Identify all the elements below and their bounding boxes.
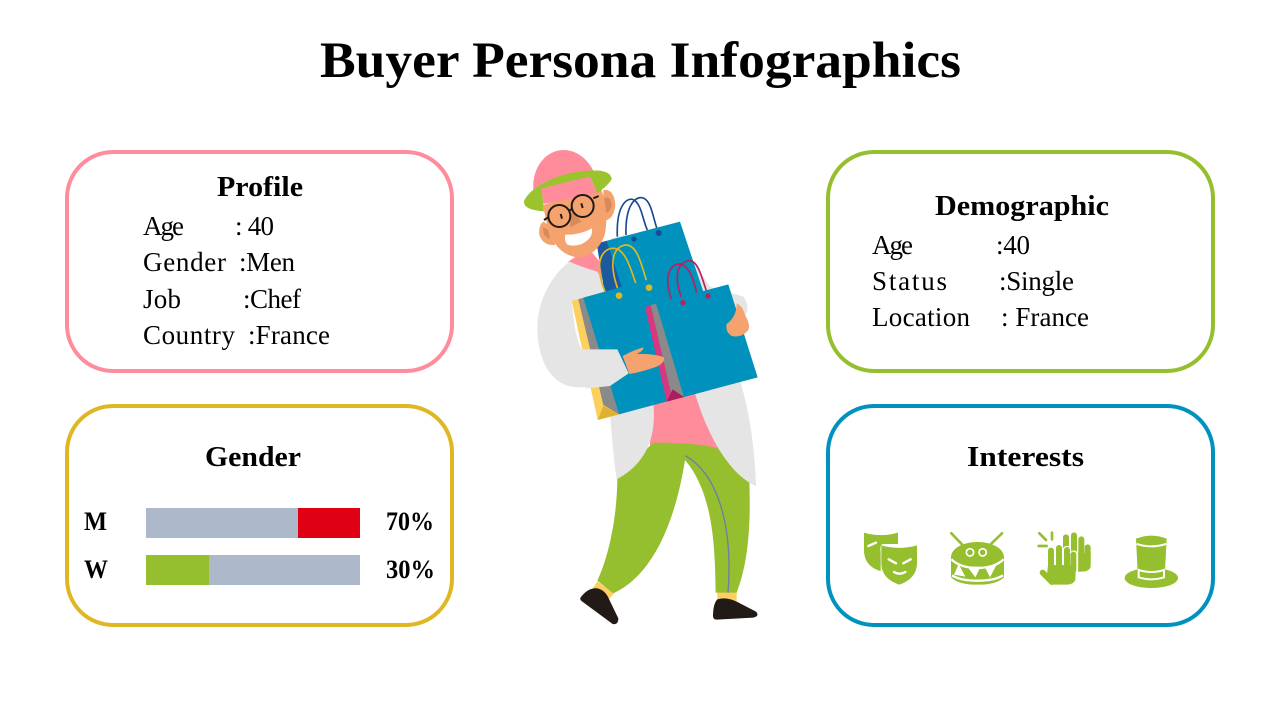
text block: demographic details — [872, 230, 1089, 332]
text block: demographic details: Location — [872, 302, 970, 332]
back hand — [1066, 535, 1088, 563]
neck — [568, 248, 610, 300]
text block: profile details: :Chef — [243, 284, 301, 314]
trouser seam — [685, 456, 729, 593]
trousers — [597, 443, 750, 593]
panel: interests — [828, 406, 1213, 625]
panel: demographic — [828, 152, 1213, 371]
smile — [565, 228, 592, 246]
bar row: women 30% — [84, 555, 435, 585]
right hand — [726, 303, 749, 337]
icon: theater masks — [864, 533, 917, 585]
text block: profile details: :France — [248, 320, 330, 350]
shirt lower — [650, 390, 723, 452]
bar row: women 30%: W — [84, 555, 108, 584]
heading: profile: Profile — [217, 172, 303, 203]
sleeve over bag — [578, 349, 629, 388]
illustration lower body — [580, 380, 757, 624]
text block: profile details: :Men — [239, 247, 296, 277]
hat band — [542, 177, 597, 204]
ears — [603, 190, 615, 221]
bar row: men 70%: 70% — [386, 507, 434, 536]
text block: demographic details: :40 — [996, 230, 1030, 260]
yellow bag side — [572, 298, 619, 420]
bar chart: gender split — [84, 507, 435, 585]
face — [543, 187, 606, 257]
illustration: shopper carrying bags — [524, 150, 758, 624]
hat brim — [524, 170, 612, 211]
text block: profile details: Gender — [143, 247, 226, 277]
front hand outline — [1043, 548, 1074, 582]
back bag handles — [617, 198, 658, 237]
text block: profile details: Job — [143, 284, 181, 314]
hand holding bag — [623, 347, 664, 374]
hat crown — [533, 150, 594, 200]
heading: gender: Gender — [205, 442, 301, 473]
grey bag side — [578, 298, 619, 414]
text block: demographic details: :Single — [999, 266, 1074, 296]
bar row: women 30%: 30% — [386, 555, 435, 584]
icon: drum — [951, 533, 1004, 585]
icon: top hat — [1125, 536, 1178, 588]
panel: gender — [67, 406, 452, 625]
left shopping bag — [583, 275, 710, 414]
right bag strips — [645, 305, 684, 402]
heading: demographic: Demographic — [935, 191, 1109, 222]
text block: profile details — [143, 211, 330, 350]
text block: profile details: : 40 — [235, 211, 274, 241]
text block: demographic details: : France — [1001, 302, 1089, 332]
text block: profile details: Age — [143, 211, 184, 241]
icon: clapping hands — [1039, 533, 1091, 585]
text block: demographic details: Status — [872, 266, 947, 296]
text block: demographic details: Age — [872, 230, 913, 260]
back shopping bag — [597, 222, 705, 313]
socks — [593, 581, 737, 602]
front hand — [1043, 548, 1073, 582]
text block: profile details: Country — [143, 320, 236, 350]
glasses — [544, 195, 599, 227]
heading: interests: Interests — [967, 442, 1084, 473]
icon group: interests — [864, 533, 1178, 588]
shoes — [580, 588, 618, 624]
coat tails — [610, 403, 654, 479]
bar row: men 70%: M — [84, 507, 107, 536]
right bag handles — [668, 261, 708, 303]
nose — [570, 212, 582, 227]
middle bag handles — [599, 245, 648, 295]
right shopping bag — [656, 284, 758, 397]
illustration upper body — [524, 150, 758, 420]
bar row: men 70% — [84, 507, 434, 538]
panel: profile — [67, 152, 452, 371]
title: Buyer Persona Infographics — [320, 33, 961, 89]
coat — [537, 262, 629, 387]
